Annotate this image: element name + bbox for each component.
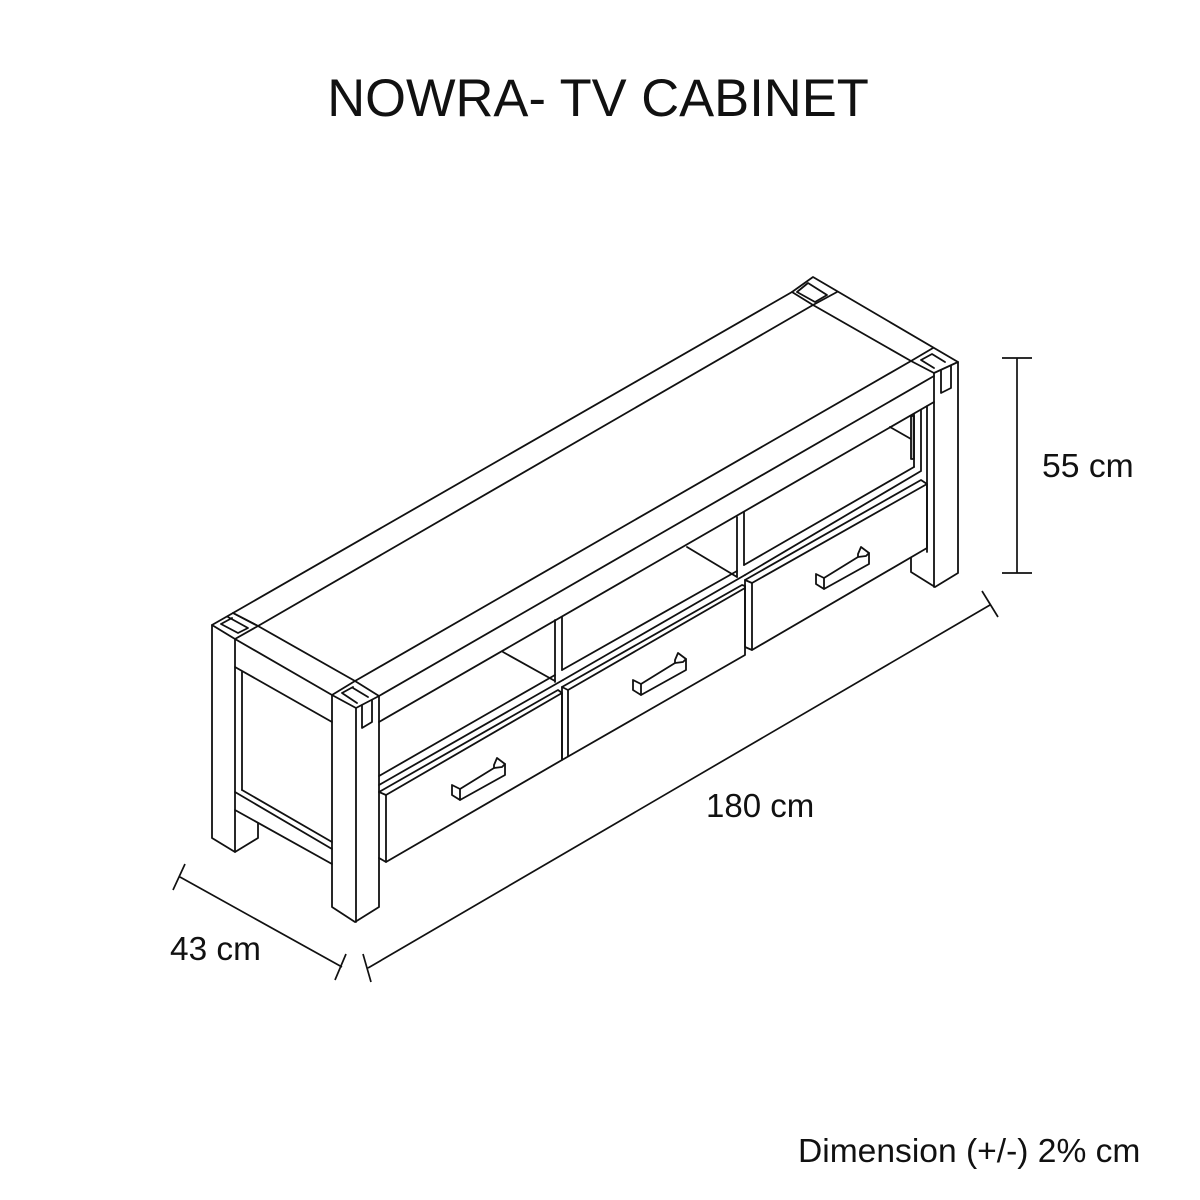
left drawer handle xyxy=(452,758,505,800)
cabinet top surface xyxy=(233,277,958,681)
width dimension line xyxy=(363,591,998,982)
shelf dividers and back panel xyxy=(503,410,921,682)
side panel with rails xyxy=(235,639,332,864)
middle drawer xyxy=(562,585,745,760)
left drawer xyxy=(379,690,562,862)
width label: 180 cm xyxy=(706,787,814,824)
left end leg xyxy=(212,613,258,852)
TV cabinet line drawing xyxy=(212,277,958,922)
middle drawer handle xyxy=(633,653,686,695)
tolerance note: Dimension (+/-) 2% cm xyxy=(798,1133,1140,1170)
front apron xyxy=(379,376,934,722)
right corner leg xyxy=(911,354,958,587)
height dimension line xyxy=(1002,358,1032,573)
depth label: 43 cm xyxy=(170,931,261,968)
front corner leg xyxy=(332,681,379,922)
shelf rails xyxy=(379,467,921,785)
right drawer xyxy=(745,480,927,650)
depth dimension line xyxy=(173,864,346,980)
height label: 55 cm xyxy=(1042,447,1134,485)
right drawer handle xyxy=(816,547,869,589)
title: NOWRA- TV CABINET xyxy=(327,69,869,128)
